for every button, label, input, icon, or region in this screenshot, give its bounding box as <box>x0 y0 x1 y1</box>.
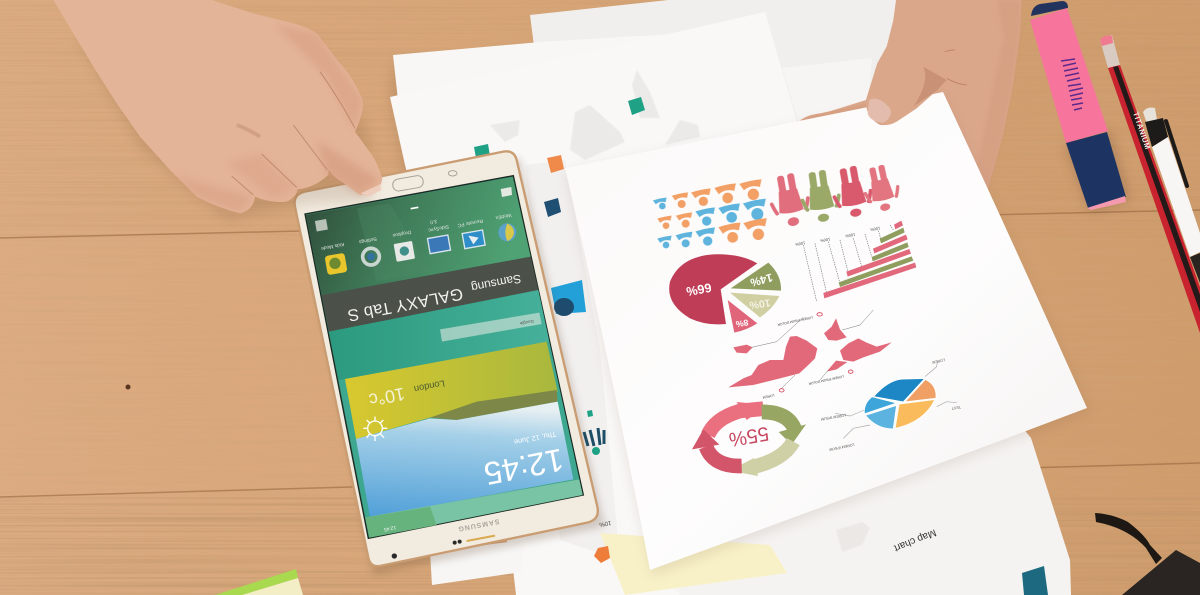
hardware: home button, camera, logo: SAMSUNG <box>457 517 500 532</box>
corner tile <box>501 187 512 197</box>
faint world map <box>490 70 700 160</box>
marker: navy cap <box>1066 132 1126 208</box>
banner text: Samsung GALAXY Tab S: GALAXY Tab S <box>346 284 465 325</box>
marker: rear cap <box>1031 1 1068 16</box>
pie callouts <box>835 362 957 438</box>
text: 10 percent: 10% <box>598 519 612 527</box>
slice: 66% <box>669 254 757 324</box>
pie chart: 66 14 10 8 percent: 10% <box>748 296 771 311</box>
home indicator dots <box>411 207 418 209</box>
bar chart <box>794 221 916 302</box>
thumbnail <box>868 99 891 123</box>
pencil <box>1100 35 1200 333</box>
app labels: Kids Mode <box>320 241 345 251</box>
world map <box>728 318 892 387</box>
lower sheet: right <box>640 400 1071 595</box>
slice: 14% <box>731 263 781 291</box>
sheet: right of map <box>770 35 880 122</box>
hand shading <box>273 23 363 130</box>
app labels: Settings <box>358 235 377 245</box>
background paper sheets <box>390 0 1071 595</box>
icon cluster on sheet <box>587 410 593 417</box>
wallpaper: yellow grass <box>345 342 558 439</box>
blue shape on sheet <box>551 280 586 314</box>
left hand <box>53 0 382 220</box>
icons: pictogram fan rows <box>653 179 768 248</box>
bar chart: 100% <box>794 240 806 247</box>
infographic group: map, pie, ring: 55% <box>727 422 770 450</box>
lower sheet scrap <box>430 540 524 585</box>
banner text: Samsung GALAXY Tab S <box>346 271 522 325</box>
app: Dropbox <box>394 241 415 262</box>
finger creases <box>232 72 355 195</box>
icon: sun <box>363 417 387 441</box>
ring of arrows: 55 percent <box>692 402 806 476</box>
infographic group: map, pie, ring <box>692 310 961 476</box>
wallpaper: teal <box>329 290 549 380</box>
sticky note: yellow <box>600 533 787 595</box>
weather: location and temperature: 10°c <box>367 384 407 410</box>
wallpaper: sky <box>356 402 573 517</box>
app grid icon <box>315 219 328 232</box>
pen <box>1143 108 1200 283</box>
weather: location and temperature <box>367 378 446 410</box>
app labels <box>320 212 512 251</box>
wallpaper: top green <box>306 177 531 295</box>
sheet: top <box>530 0 900 70</box>
date and clock: 12:45 <box>481 442 567 492</box>
marker: pink body <box>1030 8 1108 143</box>
app: SideSync <box>427 235 451 254</box>
infographic group: map, pie, ring: LOREM IPSUM <box>829 442 855 452</box>
tag: orange <box>547 155 564 173</box>
arrow: dark red <box>692 429 742 466</box>
sheet: behind left <box>393 28 770 100</box>
thumb over the sheet <box>866 20 957 125</box>
arrow: pink <box>708 402 768 435</box>
black bag <box>1095 513 1200 595</box>
tag: navy <box>544 198 561 217</box>
app: WebEx <box>498 223 516 241</box>
teal block <box>1022 566 1048 595</box>
map labels <box>762 315 844 400</box>
bar chart: 100% <box>844 232 856 239</box>
infographic group: map, pie, ring: LOREM IPSUM <box>821 413 846 421</box>
slice: 10% <box>730 293 779 317</box>
orange hexagon <box>594 546 610 563</box>
wallpaper: dark band <box>322 257 538 332</box>
pencil text: TITANIUM <box>1131 111 1152 151</box>
weather: location and temperature: London <box>413 378 446 394</box>
app labels: WebEx <box>495 212 512 221</box>
arrow: beige <box>729 442 793 476</box>
app labels: Dropbox <box>392 229 412 238</box>
bar chart: 100% <box>869 226 881 233</box>
highlighter marker <box>1030 1 1130 212</box>
pie chart: 66 14 10 8 percent: 8% <box>735 317 749 329</box>
map labels: LOREM IPSUM DOLOR <box>777 315 813 327</box>
wallpaper: bottom green <box>365 479 583 538</box>
pie chart: 66 14 10 8 percent: 66% <box>685 280 712 298</box>
hardware: home button, camera, logo <box>392 171 500 559</box>
app labels: Remote PC <box>457 217 483 228</box>
search bar: Google <box>519 319 534 326</box>
tag: teal left <box>474 144 490 158</box>
map leader lines <box>752 310 873 392</box>
pie chart: 66 14 10 8 percent: 14% <box>749 271 774 288</box>
date and clock: Thu, 12 June <box>513 430 557 447</box>
right hand behind sheet <box>800 0 1022 193</box>
sticky notes <box>215 569 303 595</box>
tag: teal <box>628 97 645 115</box>
banner text: Samsung GALAXY Tab S: Samsung <box>470 271 522 295</box>
arrow: green <box>762 412 806 445</box>
icons: four people <box>767 163 902 229</box>
map labels: LOREM IPSUM DOLOR <box>808 374 844 386</box>
app: Settings <box>363 248 379 265</box>
status bar: 12:45 <box>383 524 397 532</box>
sheet: map page <box>390 12 797 595</box>
app labels: 3.0 <box>429 218 438 225</box>
infographic group: map, pie, ring: TEXT <box>950 405 961 411</box>
tablet screen <box>305 176 583 538</box>
app: Kids Mode <box>325 253 348 275</box>
text: Map chart: Map chart <box>892 526 938 553</box>
app labels: SideSync <box>427 223 449 233</box>
small map on sheet <box>836 522 870 552</box>
search bar <box>440 313 542 342</box>
infographic group: people and charts <box>653 163 916 333</box>
slice: 8% <box>728 300 757 333</box>
map labels: LOREM <box>762 393 775 400</box>
bar chart: 100% <box>819 237 831 244</box>
tablet body <box>295 151 598 566</box>
main printed chart sheet <box>565 92 1090 576</box>
fingernail <box>361 184 381 197</box>
hand silhouette <box>53 0 382 213</box>
pie chart: blue and orange <box>864 378 936 429</box>
tablet <box>295 151 605 575</box>
app: Remote PC <box>462 230 485 249</box>
infographic group: map, pie, ring: LOREM <box>932 358 945 364</box>
marker: barcode <box>1061 59 1083 110</box>
pie chart: 66 14 10 8 percent <box>669 254 781 333</box>
